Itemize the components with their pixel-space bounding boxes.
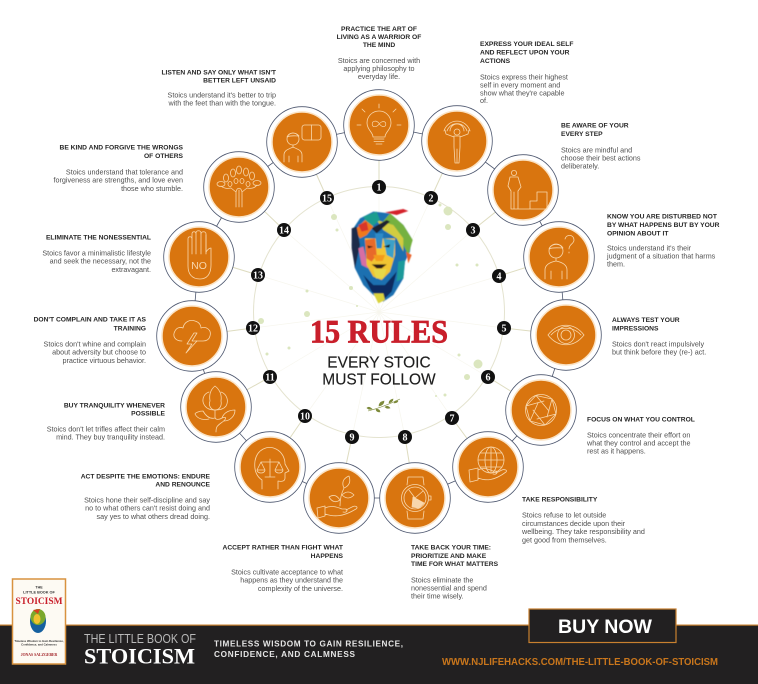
icon: flower xyxy=(195,386,235,432)
rule 12 text xyxy=(34,316,147,365)
rule 9 text: complexity of the universe. xyxy=(258,584,343,593)
rule 3 text: Stoics are mindful and xyxy=(561,146,632,154)
book cover: THE xyxy=(35,586,43,590)
rule 13 text: Stoics favor a minimalistic lifestyle xyxy=(42,248,151,258)
rule 13 text: extravagant. xyxy=(111,265,151,274)
book title xyxy=(84,632,196,668)
rule 2 text: show what they're capable xyxy=(480,88,564,98)
rule 4 text: BY WHAT HAPPENS BUT BY YOUR xyxy=(607,222,720,229)
tagline xyxy=(214,640,403,659)
book title: STOICISM xyxy=(84,644,195,668)
buy now button xyxy=(529,609,676,642)
rule 14 text: those who stumble. xyxy=(121,184,183,193)
rule 7 text: Stoics refuse to let outside xyxy=(522,510,606,520)
icon: laurel twig xyxy=(367,399,400,412)
rule 10 text: ACT DESPITE THE EMOTIONS: ENDURE xyxy=(81,474,211,480)
rule 4 text: KNOW YOU ARE DISTURBED NOT xyxy=(607,214,718,220)
medallion 1 xyxy=(344,90,414,160)
medallion 5 xyxy=(531,300,601,370)
rule 2 text: ACTIONS xyxy=(480,58,511,65)
rule 15 text xyxy=(161,70,277,108)
number badges: 8 xyxy=(402,432,408,444)
number badges: 12 xyxy=(248,324,258,334)
rule 11 text: mind. They buy tranquility instead. xyxy=(56,432,165,442)
footer band xyxy=(0,624,758,684)
rule 5 text: IMPRESSIONS xyxy=(612,326,659,332)
number badges: 3 xyxy=(470,226,476,236)
icon: storm cloud xyxy=(174,320,210,353)
rule 15 text: BETTER LEFT UNSAID xyxy=(203,78,276,84)
rule 5 text: but think before they (re-) act. xyxy=(612,348,706,356)
medallion 15 xyxy=(267,107,337,177)
rule 3 text: choose their best actions xyxy=(561,154,641,162)
number badges: 7 xyxy=(450,414,454,424)
medallion 11 xyxy=(181,372,251,442)
rule 14 text: Stoics understand that tolerance and xyxy=(66,168,183,176)
rule 12 text: about adversity but choose to xyxy=(52,348,146,356)
number badges: 4 xyxy=(496,272,502,282)
green paint splatter xyxy=(258,204,482,397)
rule 11 text: POSSIBLE xyxy=(131,410,166,418)
rule 4 text: them. xyxy=(607,260,625,268)
rule 3 text: deliberately. xyxy=(561,162,599,170)
spokes from badges to medallions xyxy=(192,125,566,498)
number badges: 13 xyxy=(253,270,263,282)
rule 8 text: their time wisely. xyxy=(411,592,464,600)
website url: WWW.NJLIFEHACKS.COM/THE-LITTLE-BOOK-OF-STOICISM xyxy=(442,657,718,668)
medallion 10 xyxy=(235,432,305,502)
book cover: Timeless Wisdom to Gain Resilience, xyxy=(14,639,64,643)
rule 6 text xyxy=(586,416,695,456)
book cover: LITTLE BOOK OF xyxy=(23,590,55,594)
icon: stop hand with NO xyxy=(188,231,211,279)
medallion 12 xyxy=(157,301,227,371)
rule 14 text xyxy=(54,144,184,193)
rule 3 text: EVERY STEP xyxy=(561,131,603,138)
rule 1 text: applying philosophy to xyxy=(343,64,415,73)
icon: person with question mark xyxy=(545,235,574,279)
medallion 7 xyxy=(453,432,523,502)
rule 15 text: Stoics understand it's better to trip xyxy=(168,90,276,100)
rule 12 text: TRAINING xyxy=(114,326,146,332)
rule 14 text: forgiveness are strengths, and love even xyxy=(54,176,183,184)
rule 9 text: Stoics cultivate acceptance to what xyxy=(231,568,343,576)
rule 7 text: circumstances decide upon their xyxy=(522,519,626,528)
rule 14 text: OF OTHERS xyxy=(144,153,184,160)
rule 2 text: of. xyxy=(480,96,488,105)
rule 4 text xyxy=(606,214,720,268)
rule 12 text: DON'T COMPLAIN AND TAKE IT AS xyxy=(34,316,147,324)
rule 12 text: practice virtuous behavior. xyxy=(62,356,146,365)
book cover xyxy=(12,579,66,664)
rule 8 text: PRIORITIZE AND MAKE xyxy=(411,553,487,560)
medallion 6 xyxy=(506,375,576,445)
medallion 9 xyxy=(304,463,374,533)
rule 11 text xyxy=(47,402,166,442)
number badges: 10 xyxy=(300,412,310,422)
rule 9 text: happens as they understand the xyxy=(240,576,343,584)
lion head illustration xyxy=(352,209,413,303)
rule 6 text: rest as it happens. xyxy=(587,446,646,456)
rule 1 text: THE MIND xyxy=(363,42,395,49)
rule 11 text: Stoics don't let trifles affect their calm xyxy=(47,424,165,434)
central ring xyxy=(254,186,504,438)
icon: plant in hand xyxy=(317,476,357,518)
rule 4 text: judgment of a situation that harms xyxy=(606,252,716,260)
rule 12 text: Stoics don't whine and complain xyxy=(44,340,146,348)
rule 9 text: ACCEPT RATHER THAN FIGHT WHAT xyxy=(223,544,344,552)
rule 5 text: Stoics don't react impulsively xyxy=(612,340,704,348)
icon: person with speech screen xyxy=(284,125,321,162)
number badges xyxy=(246,180,511,444)
rule 8 text: TIME FOR WHAT MATTERS xyxy=(411,561,499,568)
rule 7 text xyxy=(521,496,645,544)
rule 2 text: Stoics express their highest xyxy=(480,72,568,82)
faint radial lines xyxy=(253,187,504,437)
icon: person with aura xyxy=(444,121,470,163)
rule 2 text xyxy=(480,41,573,105)
rule 8 text: Stoics eliminate the xyxy=(411,576,473,584)
rule 15 text: LISTEN AND SAY ONLY WHAT ISN'T xyxy=(161,70,277,76)
icon: head with scales xyxy=(255,448,289,489)
rule 1 text: everyday life. xyxy=(358,72,400,81)
medallion 2 xyxy=(422,106,492,176)
rule 7 text: TAKE RESPONSIBILITY xyxy=(522,496,598,504)
number badges: 9 xyxy=(350,432,354,444)
tagline: TIMELESS WISDOM TO GAIN RESILIENCE, xyxy=(214,640,403,648)
buy now button: BUY NOW xyxy=(558,616,653,638)
number badges: 5 xyxy=(502,324,506,334)
medallion 4 xyxy=(524,222,594,292)
number badges: 2 xyxy=(428,194,434,204)
icon: wrist watch xyxy=(402,477,431,519)
tagline: CONFIDENCE, AND CALMNESS xyxy=(214,650,356,659)
rule 10 text xyxy=(81,474,211,521)
subtitle: MUST FOLLOW xyxy=(322,372,436,388)
icon: camera aperture xyxy=(526,394,556,426)
rule 8 text xyxy=(411,544,499,600)
rule 10 text: AND RENOUNCE xyxy=(155,482,211,488)
rule 10 text: say yes to what others dread doing. xyxy=(97,512,210,521)
rule 1 text: PRACTICE THE ART OF xyxy=(341,26,417,33)
rule 3 text: BE AWARE OF YOUR xyxy=(561,122,629,130)
rule 6 text: what they control and accept the xyxy=(586,438,690,448)
icon: people tree xyxy=(217,166,261,207)
rule 4 text: Stoics understand it's their xyxy=(607,244,692,252)
rule 10 text: no to what others can't resist doing and xyxy=(85,504,210,512)
rule 9 text xyxy=(223,544,344,593)
medallion 3 xyxy=(488,155,558,225)
book cover: JONAS SALZGEBER xyxy=(21,653,58,657)
rule 6 text: FOCUS ON WHAT YOU CONTROL xyxy=(587,416,695,424)
number badges: 14 xyxy=(279,226,289,236)
rule 14 text: BE KIND AND FORGIVE THE WRONGS xyxy=(60,144,184,152)
rule 8 text: nonessential and spend xyxy=(411,584,487,592)
rule 15 text: with the feet than with the tongue. xyxy=(168,98,276,108)
icon: globe on hand xyxy=(469,447,507,482)
rule 13 text xyxy=(42,234,151,274)
rule 5 text: ALWAYS TEST YOUR xyxy=(612,317,680,324)
number badges: 11 xyxy=(265,372,275,384)
book cover: Confidence, and Calmness xyxy=(21,642,57,646)
rule 9 text: HAPPENS xyxy=(311,553,344,560)
book title: THE LITTLE BOOK OF xyxy=(84,632,196,646)
subtitle xyxy=(322,354,436,388)
rule 1 text: Stoics are concerned with xyxy=(338,56,420,65)
rule 8 text: TAKE BACK YOUR TIME: xyxy=(411,544,491,552)
connector lines between medallions xyxy=(192,125,566,498)
rule 13 text: and seek the necessary, not the xyxy=(50,256,151,266)
rule 4 text: OPINION ABOUT IT xyxy=(607,230,669,238)
icon: eye xyxy=(548,325,584,345)
number badges: 1 xyxy=(376,182,382,194)
subtitle: EVERY STOIC xyxy=(327,354,431,372)
rule 2 text: AND REFLECT UPON YOUR xyxy=(480,50,570,56)
medallion 13: NO xyxy=(191,260,207,272)
medallion 14 xyxy=(204,152,274,222)
rule 13 text: ELIMINATE THE NONESSENTIAL xyxy=(46,234,151,242)
rule 1 text xyxy=(337,26,421,81)
rule 1 text: LIVING AS A WARRIOR OF xyxy=(337,34,421,41)
medallion 13 xyxy=(164,222,234,292)
rule 6 text: Stoics concentrate their effort on xyxy=(587,430,690,440)
rule 7 text: wellbeing. They take responsibility and xyxy=(521,527,645,536)
rule 11 text: BUY TRANQUILITY WHENEVER xyxy=(64,402,165,410)
medallion 8 xyxy=(380,463,450,533)
rule 5 text xyxy=(612,317,706,356)
rule 2 text: EXPRESS YOUR IDEAL SELF xyxy=(480,41,573,48)
number badges: 15 xyxy=(322,194,332,204)
number badges: 6 xyxy=(486,372,490,384)
rule 10 text: Stoics hone their self-discipline and say xyxy=(84,496,210,504)
rule 7 text: get good from themselves. xyxy=(522,536,607,544)
rule 2 text: self in every moment and xyxy=(480,80,560,90)
icon: light bulb xyxy=(357,104,401,144)
book cover: STOICISM xyxy=(16,597,63,607)
icon: person on steps xyxy=(508,170,547,209)
rule 3 text xyxy=(561,122,641,170)
title: 15 rules: 15 RULES xyxy=(310,314,448,350)
